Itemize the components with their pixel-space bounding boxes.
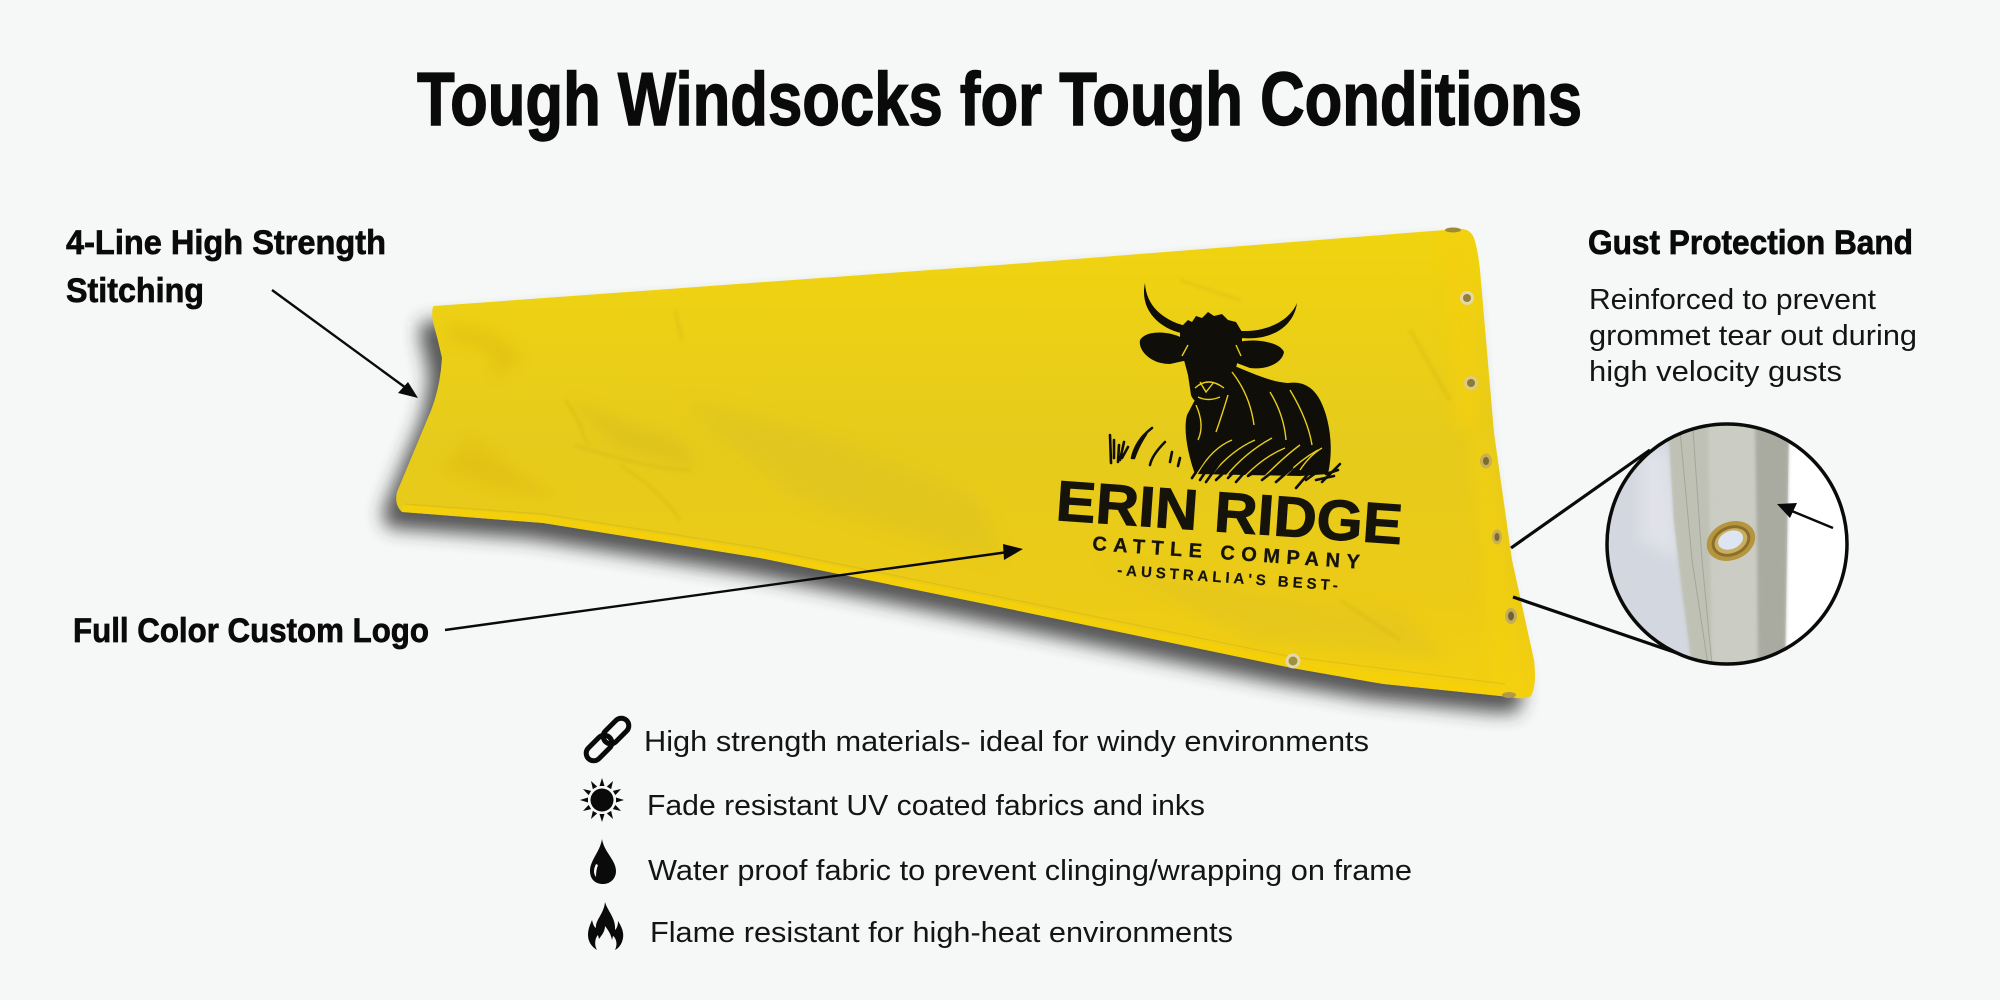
windsock shadow xyxy=(383,245,1522,713)
feature: fade resistant xyxy=(580,778,1205,822)
text: gust protection description: high velocity gusts xyxy=(1589,356,1842,388)
zoom lens: grommet detail xyxy=(1600,420,1847,665)
arrow: band detail xyxy=(1777,503,1833,528)
icon: flame xyxy=(588,902,623,950)
title: Tough Windsocks for Tough Conditions xyxy=(417,57,1582,141)
label: stitching xyxy=(66,224,386,310)
text: gust protection description xyxy=(1589,284,1917,388)
logo: AUSTRALIA'S BEST: -AUSTRALIA'S BEST- xyxy=(1117,562,1341,595)
zoom callout lines xyxy=(1511,450,1677,653)
arrow: stitching xyxy=(272,290,418,398)
logo: CATTLE COMPANY: CATTLE COMPANY xyxy=(1092,533,1365,574)
feature: water proof xyxy=(590,839,1412,887)
logo: bull xyxy=(1140,283,1331,476)
icon: chain xyxy=(583,715,632,764)
fabric wrinkles xyxy=(402,235,1525,700)
windsock body xyxy=(396,229,1535,698)
logo: ERIN RIDGE: ERIN RIDGE xyxy=(1054,469,1405,557)
label: gust protection band: Gust Protection Band xyxy=(1588,224,1913,262)
arrow: custom logo xyxy=(445,544,1023,630)
label: stitching: Stitching xyxy=(66,272,204,310)
icon: water drop xyxy=(590,839,616,884)
label: stitching: 4-Line High Strength xyxy=(66,224,386,262)
grommets xyxy=(1286,228,1517,698)
feature: flame resistant: Flame resistant for high-heat environments xyxy=(650,917,1233,949)
feature: water proof: Water proof fabric to prevent clinging/wrapping on frame xyxy=(648,855,1412,887)
icon: sun xyxy=(580,778,624,822)
feature: flame resistant xyxy=(588,902,1233,950)
logo: grass xyxy=(1110,428,1340,488)
windsock photo xyxy=(383,228,1535,713)
feature: high strength: High strength materials- ideal for windy environments xyxy=(644,726,1369,758)
text: gust protection description: Reinforced to prevent xyxy=(1589,284,1876,316)
brass grommet xyxy=(1701,514,1761,568)
feature: high strength xyxy=(583,715,1369,764)
label: custom logo: Full Color Custom Logo xyxy=(73,612,429,650)
feature: fade resistant: Fade resistant UV coated fabrics and inks xyxy=(647,790,1205,822)
text: gust protection description: grommet tear out during xyxy=(1589,320,1917,352)
